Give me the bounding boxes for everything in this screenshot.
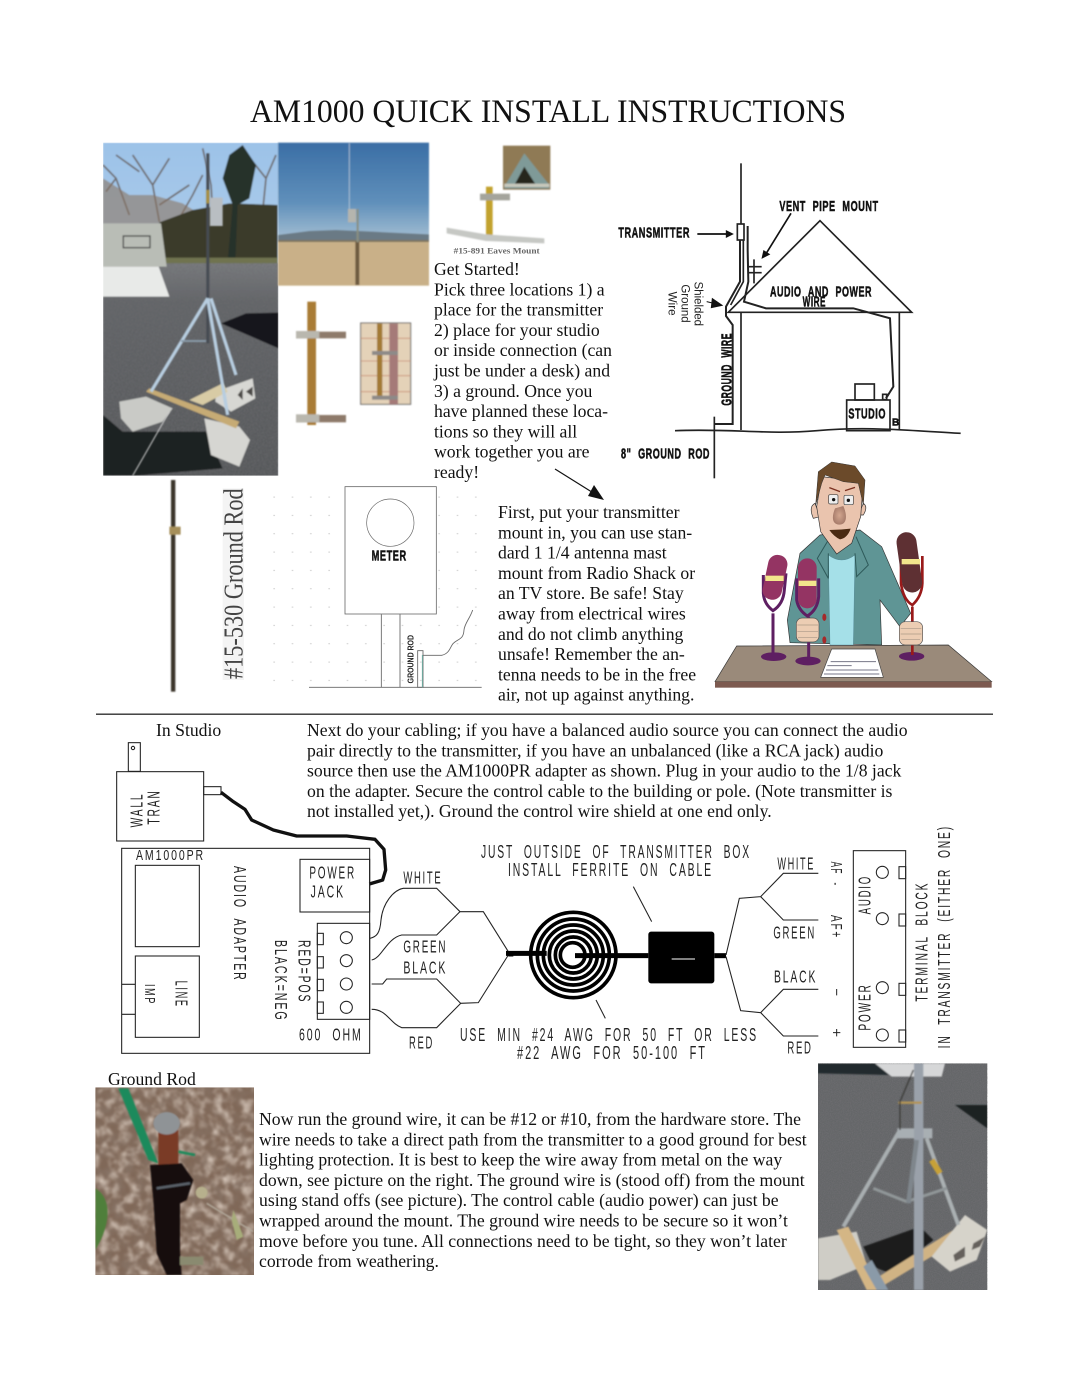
adapter labels: AUDIO ADAPTER: [230, 866, 250, 982]
label: studio: STUDIO: [848, 406, 886, 422]
wire labels: WHITE: [777, 853, 815, 873]
terminal block labels: [854, 825, 954, 1048]
text block: get started: have planned these loca-: [434, 401, 608, 421]
photos: top group: [103, 143, 550, 477]
text block: get started: Get Started!: [434, 259, 520, 279]
text block: mounting instructions: unsafe! Remember the an-: [498, 644, 685, 664]
meter box: [345, 487, 436, 614]
arrow: vent pipe mount: [763, 213, 791, 257]
text block: mounting instructions: and do not climb anything: [498, 624, 684, 644]
eyes and brows: [829, 487, 855, 505]
adapter labels: IMP: [141, 984, 157, 1005]
text block: mounting instructions: First, put your transmitter: [498, 502, 680, 522]
text block: get started: or inside connection (can: [434, 340, 612, 360]
meter box: METER: [372, 549, 407, 565]
terminal block: [853, 851, 906, 1047]
wire labels: WHITE: [403, 867, 442, 887]
adapter labels: 600 OHM: [299, 1025, 363, 1045]
photo: bracket on siding: [361, 323, 411, 404]
adapter labels: JACK: [311, 882, 345, 902]
microphone: right: [895, 531, 924, 661]
label: shielded ground wire: Shielded: [691, 282, 705, 326]
title: AM1000 QUICK INSTALL INSTRUCTIONS: [250, 94, 846, 130]
adapter labels: LINE: [171, 981, 191, 1008]
text block: get started: just be under a desk) and: [433, 360, 610, 380]
text block: cabling: [307, 720, 908, 821]
label: wire gauge note: #22 AWG FOR 50-100 FT: [517, 1043, 707, 1063]
label: audio and power wire: AUDIO AND POWER: [770, 285, 872, 301]
wire labels: RED: [409, 1032, 434, 1052]
photo: eaves mount: [447, 146, 550, 243]
terminal block labels: IN TRANSMITTER (EITHER ONE): [934, 825, 954, 1048]
label: b: B: [892, 417, 900, 428]
label: ferrite note: INSTALL FERRITE ON CABLE: [508, 860, 713, 880]
photo: tripod mast on roof: [103, 143, 278, 477]
polarity labels: AF -: [827, 862, 844, 887]
text block: ground wire: lighting protection. It is best to keep the wire away from metal on the way: [259, 1150, 782, 1170]
adapter labels: POWER: [309, 862, 356, 882]
text block: ground wire: move before you tune. All connections need to be tight, so they won’t later: [259, 1231, 787, 1251]
diagram: house with antenna: [618, 163, 961, 478]
ferrite: [648, 932, 726, 983]
wall transformer: TRAN: [143, 789, 163, 825]
text block: ground wire: wrapped around the mount. The ground wire needs to be secure so it won’t: [259, 1210, 788, 1230]
wires to adapter: [370, 888, 513, 1028]
label: ferrite note: [481, 842, 751, 880]
hair: [816, 462, 865, 505]
mouth: [829, 529, 851, 539]
text block: get started: work together you are: [434, 442, 590, 462]
photo: wall mount bracket: [296, 302, 346, 425]
adapter labels: RED=POS: [294, 940, 314, 1003]
text block: ground wire: using stand offs (see picture). The control cable (audio power) can just be: [259, 1190, 779, 1210]
label: ground rod: GROUND ROD: [405, 635, 415, 683]
arrow: from text to transmitter step: [555, 469, 604, 500]
lapels: [817, 537, 868, 578]
paper: [821, 649, 883, 677]
diagram: coil, ferrite and transmitter terminal block: [506, 825, 954, 1057]
label: shielded ground wire: Ground: [679, 284, 693, 323]
terminal block labels: AUDIO: [854, 875, 874, 914]
text block: mounting instructions: away from electrical wires: [498, 604, 686, 624]
text block: ground wire: wire needs to take a direct path from the transmitter to a good ground for best: [259, 1129, 807, 1149]
text block: ground wire: corrode from weathering.: [259, 1251, 439, 1271]
face: [817, 477, 863, 554]
label: wire gauge note: USE MIN #24 AWG FOR 50 FT OR LESS: [460, 1025, 758, 1045]
label: ground wire: GROUND WIRE: [719, 333, 735, 406]
leader lines: [596, 887, 652, 1018]
wall transformer: WALL: [127, 793, 147, 827]
text block: mounting instructions: mount from Radio Shack or: [498, 563, 695, 583]
wall transformer: [117, 743, 221, 841]
text block: cabling: source then use the AM1000PR adapter as shown. Plug in your audio to the 1/8 jack: [307, 761, 902, 781]
label: ferrite note: JUST OUTSIDE OF TRANSMITTER BOX: [481, 842, 751, 862]
label: audio and power wire: [770, 285, 872, 311]
shed: [103, 223, 167, 267]
adapter labels: BLACK=NEG: [271, 940, 291, 1022]
label: shielded ground wire: [665, 282, 705, 326]
text block: get started: Pick three locations 1) a: [434, 279, 605, 299]
cinder blocks: [119, 397, 173, 432]
hand: right: [899, 622, 923, 645]
text block: cabling: Next do your cabling; if you have a balanced audio source you can connect the audio: [307, 720, 908, 740]
panel: ground rod and meter: [169, 480, 482, 692]
adapter box: [122, 848, 370, 1053]
diagram: adapter wiring left: [117, 743, 513, 1053]
text block: cabling: on the adapter. Secure the control cable to the building or pole. (Note transmitter is: [307, 781, 893, 801]
text block: get started: place for the transmitter: [434, 300, 603, 320]
arrow: transmitter: [697, 231, 732, 237]
photo: ground rod clamp: [95, 1087, 254, 1275]
wire labels: [403, 867, 447, 1052]
text block: ground wire: [259, 1109, 807, 1271]
label: vent pipe mount: VENT PIPE MOUNT: [779, 199, 879, 215]
label: wire gauge note: [460, 1025, 758, 1063]
wire labels: RED: [787, 1037, 813, 1057]
microphone: left: [761, 553, 789, 661]
label: shielded ground wire: Wire: [665, 292, 679, 316]
wire labels: BLACK: [403, 957, 447, 977]
text block: ground wire: Now run the ground wire, it can be #12 or #10, from the hardware store. The: [259, 1109, 801, 1129]
shirt: [828, 555, 855, 645]
ears: [811, 503, 866, 518]
hand: left: [796, 618, 819, 642]
desk: [715, 645, 992, 688]
text block: get started: 3) a ground. Once you: [434, 381, 593, 401]
photo: tripod base close-up: [818, 1063, 987, 1290]
text block: mounting instructions: [498, 502, 696, 705]
house outline: [675, 221, 961, 433]
nose: [833, 506, 846, 525]
text block: mounting instructions: air, not up against anything.: [498, 685, 694, 705]
text block: cabling: pair directly to the transmitter, if you have an unbalanced (like a RCA jack) audio: [307, 740, 884, 760]
antenna and transmitter: [714, 163, 893, 478]
eaves mount caption: #15-891 Eaves Mount: [454, 246, 540, 255]
label: ground rod: 8" GROUND ROD: [621, 446, 710, 462]
terminal block labels: TERMINAL BLOCK: [912, 882, 932, 1002]
microphone: middle: [795, 558, 821, 665]
text block: mounting instructions: dard 1 1/4 antenna mast: [498, 543, 667, 563]
wire labels: BLACK: [774, 967, 817, 987]
label: transmitter: TRANSMITTER: [618, 225, 690, 241]
text block: get started: ready!: [434, 462, 479, 482]
polarity labels: [827, 862, 844, 1036]
photo: mast against wall and sky: [278, 143, 429, 286]
divider rule: [96, 714, 993, 715]
power cable: [221, 792, 386, 884]
meter post and ground: [309, 610, 482, 687]
heading: in studio: In Studio: [156, 720, 221, 740]
cable coil: [506, 912, 648, 998]
text block: ground wire: down, see picture on the right. The ground wire is (stood off) from the mount: [259, 1170, 805, 1190]
text block: get started: 2) place for your studio: [434, 320, 600, 340]
text block: mounting instructions: tenna needs to be in the free: [498, 664, 696, 684]
text block: mounting instructions: mount in, you can use stan-: [498, 522, 692, 542]
arrow: shielded ground wire: [707, 299, 722, 308]
dotted grid background: [268, 485, 482, 687]
wire branches: [726, 873, 818, 1036]
adapter labels: AM1000PR: [136, 848, 205, 864]
jacket: [787, 530, 911, 645]
heading: ground rod: Ground Rod: [108, 1069, 196, 1089]
text block: get started: tions so they will all: [434, 421, 577, 441]
illustration: radio announcer at desk: [715, 462, 992, 688]
label: audio and power wire: WIRE: [803, 295, 826, 311]
text block: cabling: not installed yet,). Ground the control wire shield at one end only.: [307, 801, 772, 821]
wire labels: GREEN: [403, 937, 447, 957]
polarity labels: AF+: [827, 915, 844, 939]
adapter labels: [136, 848, 363, 1045]
text block: get started: [433, 259, 612, 482]
text block: mounting instructions: an TV store. Be safe! Stay: [498, 583, 684, 603]
wire labels: [773, 853, 817, 1057]
wire labels: GREEN: [773, 922, 816, 942]
buttons: [822, 614, 826, 644]
terminal block labels: POWER: [854, 983, 874, 1031]
photo: ground rod: [169, 480, 181, 692]
label: ground rod part number: #15-530 Ground Rod: [218, 488, 248, 679]
mast: [206, 153, 209, 343]
